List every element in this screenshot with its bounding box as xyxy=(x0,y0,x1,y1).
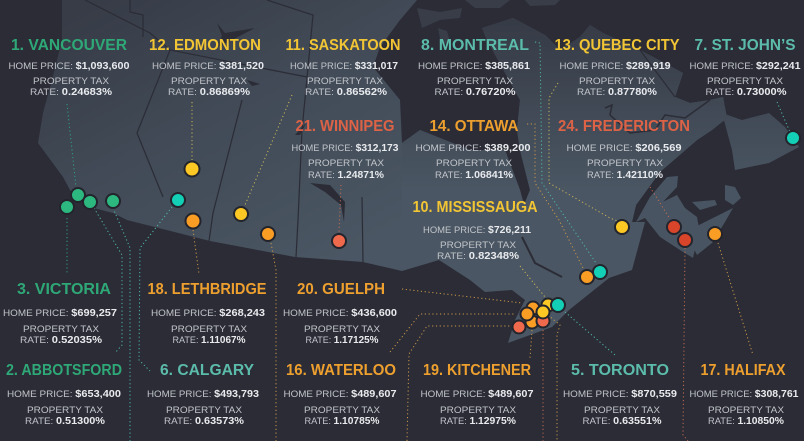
city: Victoria: RATE: 0.52035% xyxy=(20,334,103,346)
city: Fredericton: RATE: 1.42110% xyxy=(587,169,664,181)
city: Winnipeg: 21. WINNIPEG xyxy=(296,118,394,135)
city: Quebec City: RATE: 0.87780% xyxy=(577,86,658,98)
city: Saskatoon: 11. SASKATOON xyxy=(286,37,400,54)
city: Winnipeg: PROPERTY TAX xyxy=(308,158,385,169)
city: Halifax: PROPERTY TAX xyxy=(708,405,785,416)
city: Waterloo: 16. WATERLOO xyxy=(286,362,396,379)
city: Abbotsford xyxy=(6,362,122,427)
city: Fredericton: HOME PRICE: $206,569 xyxy=(566,142,682,154)
city: Guelph: 20. GUELPH xyxy=(297,281,385,298)
city: Edmonton: 12. EDMONTON xyxy=(149,37,261,54)
city: Lethbridge xyxy=(148,281,267,346)
city: Abbotsford: RATE: 0.51300% xyxy=(25,415,106,427)
city: Montreal: RATE: 0.76720% xyxy=(434,86,516,98)
city: Edmonton xyxy=(149,37,264,98)
city: Fredericton xyxy=(558,118,690,181)
city: Lethbridge: PROPERTY TAX xyxy=(171,324,248,335)
city: Guelph: RATE: 1.17125% xyxy=(306,334,379,346)
city: Waterloo: PROPERTY TAX xyxy=(304,405,381,416)
map of Canada xyxy=(38,0,799,343)
city: St. John's xyxy=(690,37,801,98)
city: Lethbridge: 18. LETHBRIDGE xyxy=(148,281,267,298)
city: Edmonton: PROPERTY TAX xyxy=(171,76,248,87)
city: Victoria: HOME PRICE: $699,257 xyxy=(3,307,117,319)
city: Quebec City: PROPERTY TAX xyxy=(579,76,656,87)
city: Halifax xyxy=(690,362,799,427)
city: Quebec City: HOME PRICE: $289,919 xyxy=(560,60,671,72)
city: Mississauga: 10. MISSISSAUGA xyxy=(412,199,538,216)
city: Toronto: RATE: 0.63551% xyxy=(582,415,662,427)
city: Winnipeg xyxy=(292,118,399,181)
city: Waterloo: RATE: 1.10785% xyxy=(304,415,380,427)
city: Abbotsford: 2. ABBOTSFORD xyxy=(6,362,122,379)
city: Guelph xyxy=(283,281,397,346)
city: Vancouver xyxy=(8,37,130,98)
city: Edmonton: RATE: 0.86869% xyxy=(168,86,251,98)
city: Quebec City xyxy=(554,37,680,98)
city: Ottawa: RATE: 1.06841% xyxy=(435,169,514,181)
city: Saskatoon: HOME PRICE: $331,017 xyxy=(290,60,398,72)
city: Toronto xyxy=(563,362,677,427)
city: Abbotsford: PROPERTY TAX xyxy=(27,405,104,416)
city: Calgary: PROPERTY TAX xyxy=(166,405,243,416)
city: Halifax: HOME PRICE: $308,761 xyxy=(690,388,799,400)
city: Kitchener: HOME PRICE: $489,607 xyxy=(420,388,534,400)
city: Mississauga xyxy=(412,199,538,262)
city: Quebec City: 13. QUEBEC CITY xyxy=(554,37,680,54)
city: Mississauga: HOME PRICE: $726,211 xyxy=(423,224,531,236)
city: Ottawa: PROPERTY TAX xyxy=(436,158,513,169)
city: Ottawa xyxy=(416,118,531,181)
city: Halifax: RATE: 1.10850% xyxy=(708,415,785,427)
city: Vancouver: RATE: 0.24683% xyxy=(30,86,113,98)
city: Winnipeg: HOME PRICE: $312,173 xyxy=(292,142,399,154)
city: Fredericton: PROPERTY TAX xyxy=(587,158,664,169)
city: Abbotsford: HOME PRICE: $653,400 xyxy=(7,388,121,400)
city: St. John's: 7. ST. JOHN’S xyxy=(694,37,796,54)
city: St. John's: HOME PRICE: $292,241 xyxy=(690,60,801,72)
city: Kitchener: PROPERTY TAX xyxy=(440,405,517,416)
city: Vancouver: HOME PRICE: $1,093,600 xyxy=(8,60,130,72)
city: Ottawa: 14. OTTAWA xyxy=(430,118,519,135)
city location dots xyxy=(60,131,800,334)
city: Toronto: HOME PRICE: $870,559 xyxy=(563,388,677,400)
city: Fredericton: 24. FREDERICTON xyxy=(558,118,690,135)
city: Toronto: PROPERTY TAX xyxy=(584,405,661,416)
city: Montreal xyxy=(418,37,530,98)
city: Guelph: HOME PRICE: $436,600 xyxy=(283,307,397,319)
city: Saskatoon: PROPERTY TAX xyxy=(307,76,384,87)
city: Montreal: HOME PRICE: $385,861 xyxy=(418,60,530,72)
city: Calgary xyxy=(147,362,259,427)
city: Montreal: 8. MONTREAL xyxy=(421,37,529,54)
city: Waterloo: HOME PRICE: $489,607 xyxy=(284,388,397,400)
city: St. John's: PROPERTY TAX xyxy=(707,76,784,87)
city: Ottawa: HOME PRICE: $389,200 xyxy=(416,142,531,154)
city: Lethbridge: HOME PRICE: $268,243 xyxy=(151,307,265,319)
city: Montreal: PROPERTY TAX xyxy=(437,76,514,87)
city: Kitchener: RATE: 1.12975% xyxy=(440,415,517,427)
city: Vancouver: PROPERTY TAX xyxy=(33,76,110,87)
city: St. John's: RATE: 0.73000% xyxy=(706,86,787,98)
city: Waterloo xyxy=(284,362,397,427)
city: Calgary: RATE: 0.63573% xyxy=(164,415,245,427)
city: Victoria: PROPERTY TAX xyxy=(23,324,100,335)
city: Lethbridge: RATE: 1.11067% xyxy=(172,334,246,346)
city: Mississauga: PROPERTY TAX xyxy=(440,240,517,251)
city: Calgary: HOME PRICE: $493,793 xyxy=(147,388,259,400)
city: Guelph: PROPERTY TAX xyxy=(304,324,381,335)
city: Kitchener xyxy=(420,362,534,427)
city: Toronto: 5. TORONTO xyxy=(571,362,669,379)
city: Vancouver: 1. VANCOUVER xyxy=(11,37,127,54)
city: Mississauga: RATE: 0.82348% xyxy=(437,250,520,262)
city: Halifax: 17. HALIFAX xyxy=(700,362,786,379)
city: Victoria: 3. VICTORIA xyxy=(17,281,111,298)
city: Victoria xyxy=(3,281,117,346)
city: Saskatoon: RATE: 0.86562% xyxy=(305,86,388,98)
city: Saskatoon xyxy=(286,37,400,98)
city: Edmonton: HOME PRICE: $381,520 xyxy=(152,60,264,72)
city: Calgary: 6. CALGARY xyxy=(160,362,254,379)
city: Kitchener: 19. KITCHENER xyxy=(423,362,531,379)
city: Winnipeg: RATE: 1.24871% xyxy=(308,169,385,181)
